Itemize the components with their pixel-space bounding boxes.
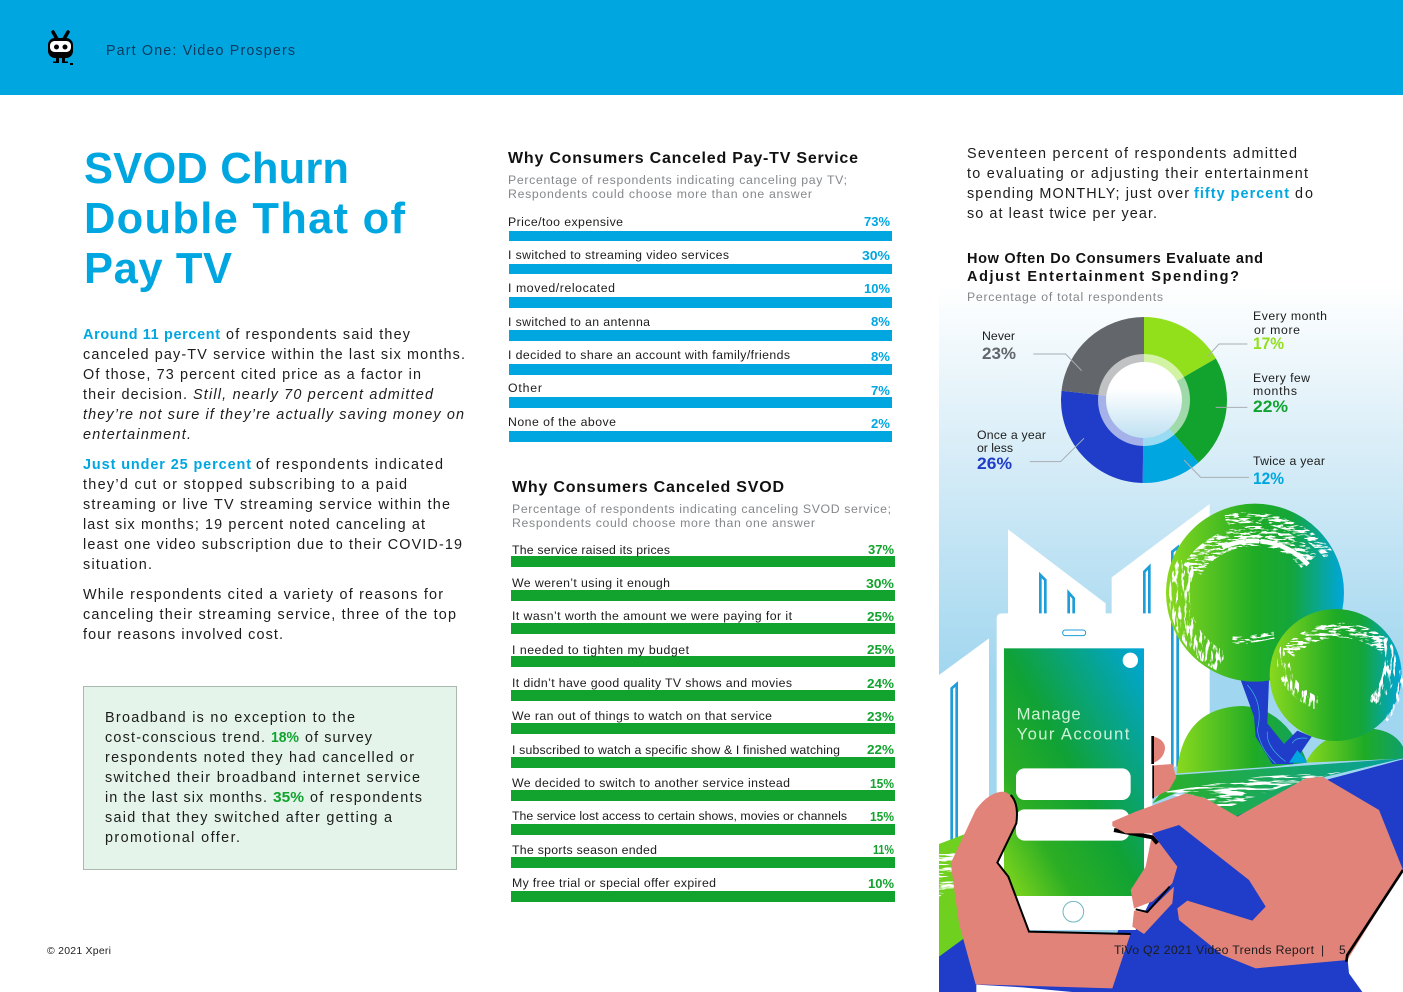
donut label: every month: Every month <box>1253 309 1327 323</box>
page title: Double That of <box>84 195 406 243</box>
copyright: © 2021 Xperi <box>47 945 111 957</box>
donut label: every few months: Every few <box>1253 371 1310 385</box>
chart subtitle: Percentage of respondents indicating canceling pay TV; <box>508 173 847 187</box>
donut label: every few months: 22% <box>1253 397 1288 416</box>
callout: broadband: 18% <box>271 730 299 746</box>
bar values: 10% <box>868 876 894 891</box>
bar labels: We ran out of things to watch on that service <box>512 709 772 723</box>
donut label: every month: 17% <box>1253 334 1284 353</box>
chart subtitle <box>508 173 847 201</box>
tree trunk <box>1241 680 1312 764</box>
bar values: 22% <box>867 742 894 757</box>
bar labels: The sports season ended <box>512 843 657 857</box>
blue ground <box>939 759 1403 992</box>
bar labels: Other <box>508 381 542 395</box>
bar values: 73% <box>864 214 890 229</box>
bar labels: I decided to share an account with family/friends <box>508 348 790 362</box>
bar values <box>866 542 894 891</box>
chart subtitle <box>512 502 891 530</box>
chart subtitle: Percentage of respondents indicating canceling SVOD service; <box>512 502 891 516</box>
bar labels: We weren’t using it enough <box>512 576 670 590</box>
donut label: every month <box>1253 309 1327 353</box>
bar labels: I needed to tighten my budget <box>512 643 690 657</box>
illustration: hands holding phone in a city <box>939 504 1403 992</box>
intro paragraph one: Of those, 73 percent cited price as a factor in <box>83 367 421 383</box>
intro paragraph one: canceled pay-TV service within the last six months. <box>83 347 465 363</box>
donut label: once a year: or less <box>977 441 1013 455</box>
bar values: 11% <box>873 842 894 857</box>
donut label: never: 23% <box>982 344 1016 363</box>
bar labels: It wasn’t worth the amount we were paying for it <box>512 609 793 623</box>
donut chart heading: Percentage of total respondents <box>967 290 1163 304</box>
phone screen text: Manage <box>1017 704 1081 723</box>
large tree <box>1166 504 1344 682</box>
page title: SVOD Churn <box>84 145 349 193</box>
intro paragraph three <box>83 587 456 643</box>
donut label: once a year: 26% <box>977 454 1012 473</box>
bar values: 7% <box>871 383 890 398</box>
page title: Pay TV <box>84 245 232 293</box>
donut leader lines <box>1030 344 1249 477</box>
pointing hand <box>1112 777 1403 968</box>
donut label: twice a year <box>1253 454 1325 488</box>
bar labels: The service raised its prices <box>512 543 670 557</box>
intro paragraph one: of respondents said they <box>226 327 411 343</box>
donut label: never: Never <box>982 329 1015 343</box>
bar labels <box>512 543 847 890</box>
bar values: 15% <box>870 776 894 791</box>
header band <box>0 0 1403 95</box>
intro paragraph two: last six months; 19 percent noted canceling at <box>83 517 425 533</box>
bar values: 25% <box>867 609 894 624</box>
intro paragraph three: While respondents cited a variety of reasons for <box>83 587 443 603</box>
intro paragraph two <box>83 457 462 573</box>
report footer: TiVo Q2 2021 Video Trends Report <box>1114 943 1315 957</box>
bar labels: The service lost access to certain shows, movies or channels <box>512 809 847 823</box>
holding hand <box>951 736 1177 992</box>
intro paragraph two: they’d cut or stopped subscribing to a paid <box>83 477 407 493</box>
bars <box>509 231 892 442</box>
callout: broadband: switched their broadband internet service <box>105 770 420 786</box>
right panel paragraph: spending MONTHLY; just over <box>967 186 1189 202</box>
intro paragraph two: situation. <box>83 557 152 573</box>
chart heading: Why Consumers Canceled SVOD <box>512 479 784 496</box>
ground brush marks <box>1166 772 1342 808</box>
donut chart heading <box>967 251 1263 304</box>
callout: broadband: respondents noted they had cancelled or <box>105 750 414 766</box>
phone screen text: Your Account <box>1017 724 1130 743</box>
right panel background <box>939 95 1403 992</box>
bar labels <box>508 215 790 429</box>
chart heading: Why Consumers Canceled Pay-TV Service <box>508 150 858 167</box>
bar values: 10% <box>864 281 890 296</box>
right panel paragraph: Seventeen percent of respondents admitted <box>967 146 1297 162</box>
bar values: 23% <box>867 709 894 724</box>
callout: broadband: said that they switched after getting a <box>105 810 392 826</box>
left ground <box>939 830 976 957</box>
callout: broadband <box>84 686 456 870</box>
intro paragraph two: streaming or live TV streaming service within the <box>83 497 450 513</box>
intro paragraph two: Just under 25 percent <box>83 457 251 473</box>
bar values <box>862 214 890 431</box>
donut label: twice a year: 12% <box>1253 469 1284 488</box>
bar values: 2% <box>871 416 890 431</box>
chart: why consumers canceled SVOD <box>511 479 895 902</box>
donut chart heading: How Often Do Consumers Evaluate and <box>967 251 1263 267</box>
chart subtitle: Respondents could choose more than one answer <box>508 187 812 201</box>
donut label: twice a year: Twice a year <box>1253 454 1325 468</box>
callout: broadband: of respondents <box>310 790 422 806</box>
bar labels: I moved/relocated <box>508 281 615 295</box>
callout: broadband: cost-conscious trend. <box>105 730 265 746</box>
report footer: | <box>1321 943 1324 957</box>
donut label: every few months <box>1253 371 1310 416</box>
bar labels: None of the above <box>508 415 616 429</box>
bar values: 30% <box>862 248 890 263</box>
intro paragraph one: they’re not sure if they’re actually saving money on <box>83 407 464 423</box>
page title <box>84 145 406 293</box>
green ground band <box>1152 758 1403 817</box>
right panel paragraph: do <box>1295 186 1313 202</box>
intro paragraph one: Around 11 percent <box>83 327 220 343</box>
phone <box>997 613 1152 930</box>
callout: broadband: in the last six months. <box>105 790 267 806</box>
intro paragraph one: their decision. <box>83 387 187 403</box>
callout: broadband: of survey <box>305 730 373 746</box>
right panel paragraph: to evaluating or adjusting their entertainment <box>967 166 1308 182</box>
donut label: once a year: Once a year <box>977 428 1046 442</box>
right panel paragraph: fifty percent <box>1194 186 1289 202</box>
small tree <box>1270 609 1402 741</box>
intro paragraph one <box>83 327 465 443</box>
right panel paragraph <box>967 146 1313 222</box>
bar labels: I switched to streaming video services <box>508 248 729 262</box>
bar labels: I subscribed to watch a specific show & I finished watching <box>512 743 840 757</box>
donut chart <box>1061 317 1227 483</box>
bar values: 25% <box>867 642 894 657</box>
bar labels: I switched to an antenna <box>508 315 650 329</box>
callout: broadband: promotional offer. <box>105 830 240 846</box>
bushes <box>1177 706 1403 773</box>
donut label: every month: or more <box>1254 323 1300 337</box>
intro paragraph two: of respondents indicated <box>256 457 443 473</box>
bar values: 24% <box>867 676 894 691</box>
intro paragraph two: least one video subscription due to their COVID-19 <box>83 537 462 553</box>
phone screen text <box>1017 704 1130 743</box>
bars <box>511 556 895 902</box>
intro paragraph three: canceling their streaming service, three of the top <box>83 607 456 623</box>
callout: broadband: 35% <box>273 790 304 806</box>
chart subtitle: Respondents could choose more than one answer <box>512 516 815 530</box>
bar values: 8% <box>871 349 890 364</box>
bar values: 37% <box>868 542 894 557</box>
white sleeve <box>1347 870 1403 992</box>
donut label: once a year <box>977 428 1046 473</box>
report footer: 5 <box>1339 943 1346 957</box>
donut label: never <box>982 329 1016 363</box>
bar labels: We decided to switch to another service instead <box>512 776 790 790</box>
intro paragraph three: four reasons involved cost. <box>83 627 283 643</box>
icon: TiVo robot logo <box>48 32 73 65</box>
callout: broadband: Broadband is no exception to the <box>105 710 355 726</box>
intro paragraph one: entertainment. <box>83 427 191 443</box>
right panel paragraph: so at least twice per year. <box>967 206 1157 222</box>
bar values: 30% <box>866 576 894 591</box>
donut chart heading: Adjust Entertainment Spending? <box>967 269 1239 285</box>
bar labels: My free trial or special offer expired <box>512 876 716 890</box>
bar values: 8% <box>871 314 890 329</box>
chart: why consumers canceled pay-TV <box>508 150 892 442</box>
bar labels: Price/too expensive <box>508 215 623 229</box>
intro paragraph one: Still, nearly 70 percent admitted <box>193 387 434 403</box>
bar labels: It didn’t have good quality TV shows and movies <box>512 676 792 690</box>
donut label: every few months: months <box>1253 384 1297 398</box>
bar values: 15% <box>870 809 894 824</box>
buildings <box>939 504 1210 857</box>
section label: Part One: Video Prospers <box>106 43 295 59</box>
